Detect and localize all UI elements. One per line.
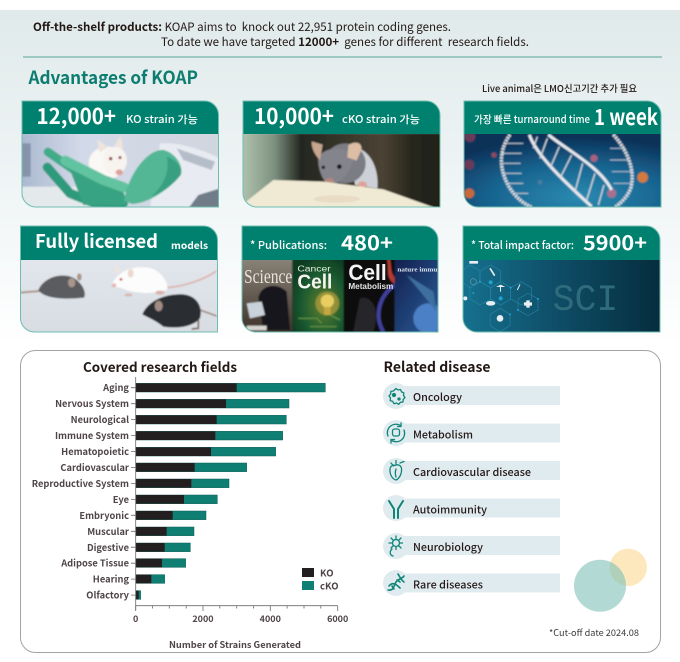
card: total impact factor xyxy=(460,226,663,333)
photo: journal covers: Metabolism xyxy=(348,281,393,291)
label: Autoimmunity xyxy=(413,502,487,518)
category labels: Reproductive System xyxy=(32,476,129,490)
photo: journal covers: nature immu xyxy=(397,267,438,274)
header band xyxy=(20,226,218,260)
card: 10,000+ cKO strain xyxy=(240,99,443,208)
list item: Autoimmunity xyxy=(383,495,560,521)
legend: KO xyxy=(320,566,334,580)
heading: Advantages of KOAP: Advantages of KOAP xyxy=(28,64,198,90)
x axis values: 6000 xyxy=(327,612,348,625)
photo: journal covers xyxy=(240,258,443,333)
card: publications xyxy=(240,226,443,333)
category labels: Neurological xyxy=(71,412,129,426)
heading: covered research fields: Covered research fields xyxy=(83,356,237,376)
x axis values xyxy=(133,612,348,625)
legend: cKO xyxy=(320,578,339,592)
icon: metabolism cycle xyxy=(387,423,405,443)
label: publications: * Publications: xyxy=(250,237,327,253)
stat: 5900+: 5900+ xyxy=(583,227,647,256)
stat: Fully licensed: Fully licensed xyxy=(35,227,158,254)
x axis values: 2000 xyxy=(192,612,214,625)
photo: medical hexagon network with SCI: SCI xyxy=(553,280,618,322)
photo: grey mouse xyxy=(240,133,443,208)
photo: journal covers: Science xyxy=(244,266,292,288)
photo: medical hexagon network with SCI xyxy=(464,260,643,332)
category labels xyxy=(32,380,130,602)
header band xyxy=(464,101,661,134)
intro text: To date we have targeted 12000+ genes for different research fields. xyxy=(161,34,529,50)
x axis values: 4000 xyxy=(260,612,281,625)
list item: Cardiovascular disease xyxy=(383,458,560,484)
icon: antibody xyxy=(389,501,403,518)
label: Metabolism xyxy=(413,428,473,442)
photo: DNA helix xyxy=(460,131,663,208)
photo: journal covers: Cell xyxy=(348,260,387,285)
category labels: Adipose Tissue xyxy=(60,556,129,570)
category labels: Aging xyxy=(102,380,129,394)
heading: related disease: Related disease xyxy=(384,357,490,377)
category labels: Immune System xyxy=(55,428,129,442)
icon: cancer cell xyxy=(389,388,405,404)
list item: Neurobiology xyxy=(383,533,560,559)
header band xyxy=(243,101,440,134)
label: total impact factor: * Total impact factor: xyxy=(471,237,574,253)
label: Neurobiology xyxy=(413,540,483,555)
category labels: Hematopoietic xyxy=(61,444,129,458)
header band xyxy=(463,226,660,260)
icon: heart xyxy=(390,460,404,480)
panel: research fields and diseases xyxy=(20,350,660,652)
category labels: Nervous System xyxy=(55,396,129,410)
card: fully licensed models xyxy=(20,226,220,333)
category labels: Hearing xyxy=(93,572,129,586)
list item: Rare diseases xyxy=(383,570,560,596)
stat: 480+: 480+ xyxy=(341,227,393,256)
photo: three mice xyxy=(21,266,217,331)
page background xyxy=(0,10,680,345)
category labels: Olfactory xyxy=(86,588,130,602)
x axis title: Number of Strains Generated xyxy=(169,638,301,651)
icon: DNA xyxy=(388,574,404,590)
stat: 10,000+: 10,000+ xyxy=(254,99,334,131)
bars xyxy=(136,383,325,599)
x axis values: 0 xyxy=(133,612,138,625)
header band xyxy=(22,101,219,134)
category labels: Digestive xyxy=(87,540,129,554)
label: models: models xyxy=(171,237,208,252)
label: turnaround: 가장 빠른 turnaround time xyxy=(474,112,590,127)
category labels: Embryonic xyxy=(79,508,129,522)
category labels: Eye xyxy=(113,492,129,506)
legend xyxy=(302,566,339,592)
note: live animal: Live animal은 LMO신고기간 추가 필요 xyxy=(482,81,637,95)
label: Cardiovascular disease xyxy=(413,465,531,480)
list item: Metabolism xyxy=(383,420,560,446)
photo: mouse on gloved hand xyxy=(20,133,220,208)
category labels: Muscular xyxy=(87,524,130,538)
axes xyxy=(131,377,338,611)
photo: journal covers: Cancer xyxy=(297,264,331,274)
card: fastest turnaround xyxy=(460,100,663,208)
intro text xyxy=(33,19,529,50)
bar chart: strains per research field xyxy=(32,377,348,651)
category labels: Cardiovascular xyxy=(60,460,130,474)
header band xyxy=(242,226,439,260)
list item: Oncology xyxy=(383,383,560,409)
stat: 12,000+: 12,000+ xyxy=(36,99,116,131)
icon: neuron xyxy=(389,536,402,556)
label: KO strain: KO strain 가능 xyxy=(126,112,198,127)
label: Rare diseases xyxy=(413,578,483,592)
footnote: cut-off date: *Cut-off date 2024.08 xyxy=(549,626,639,639)
card: 12,000+ KO strain xyxy=(20,99,220,208)
label: cKO strain: cKO strain 가능 xyxy=(342,112,420,127)
stat: 1 week: 1 week xyxy=(594,100,659,132)
photo: journal covers: Cell xyxy=(297,271,332,293)
label: Oncology xyxy=(413,390,462,405)
decorative venn circles xyxy=(574,549,647,612)
intro text: Off-the-shelf products: KOAP aims to knock out 22,951 protein coding genes. xyxy=(33,19,451,35)
